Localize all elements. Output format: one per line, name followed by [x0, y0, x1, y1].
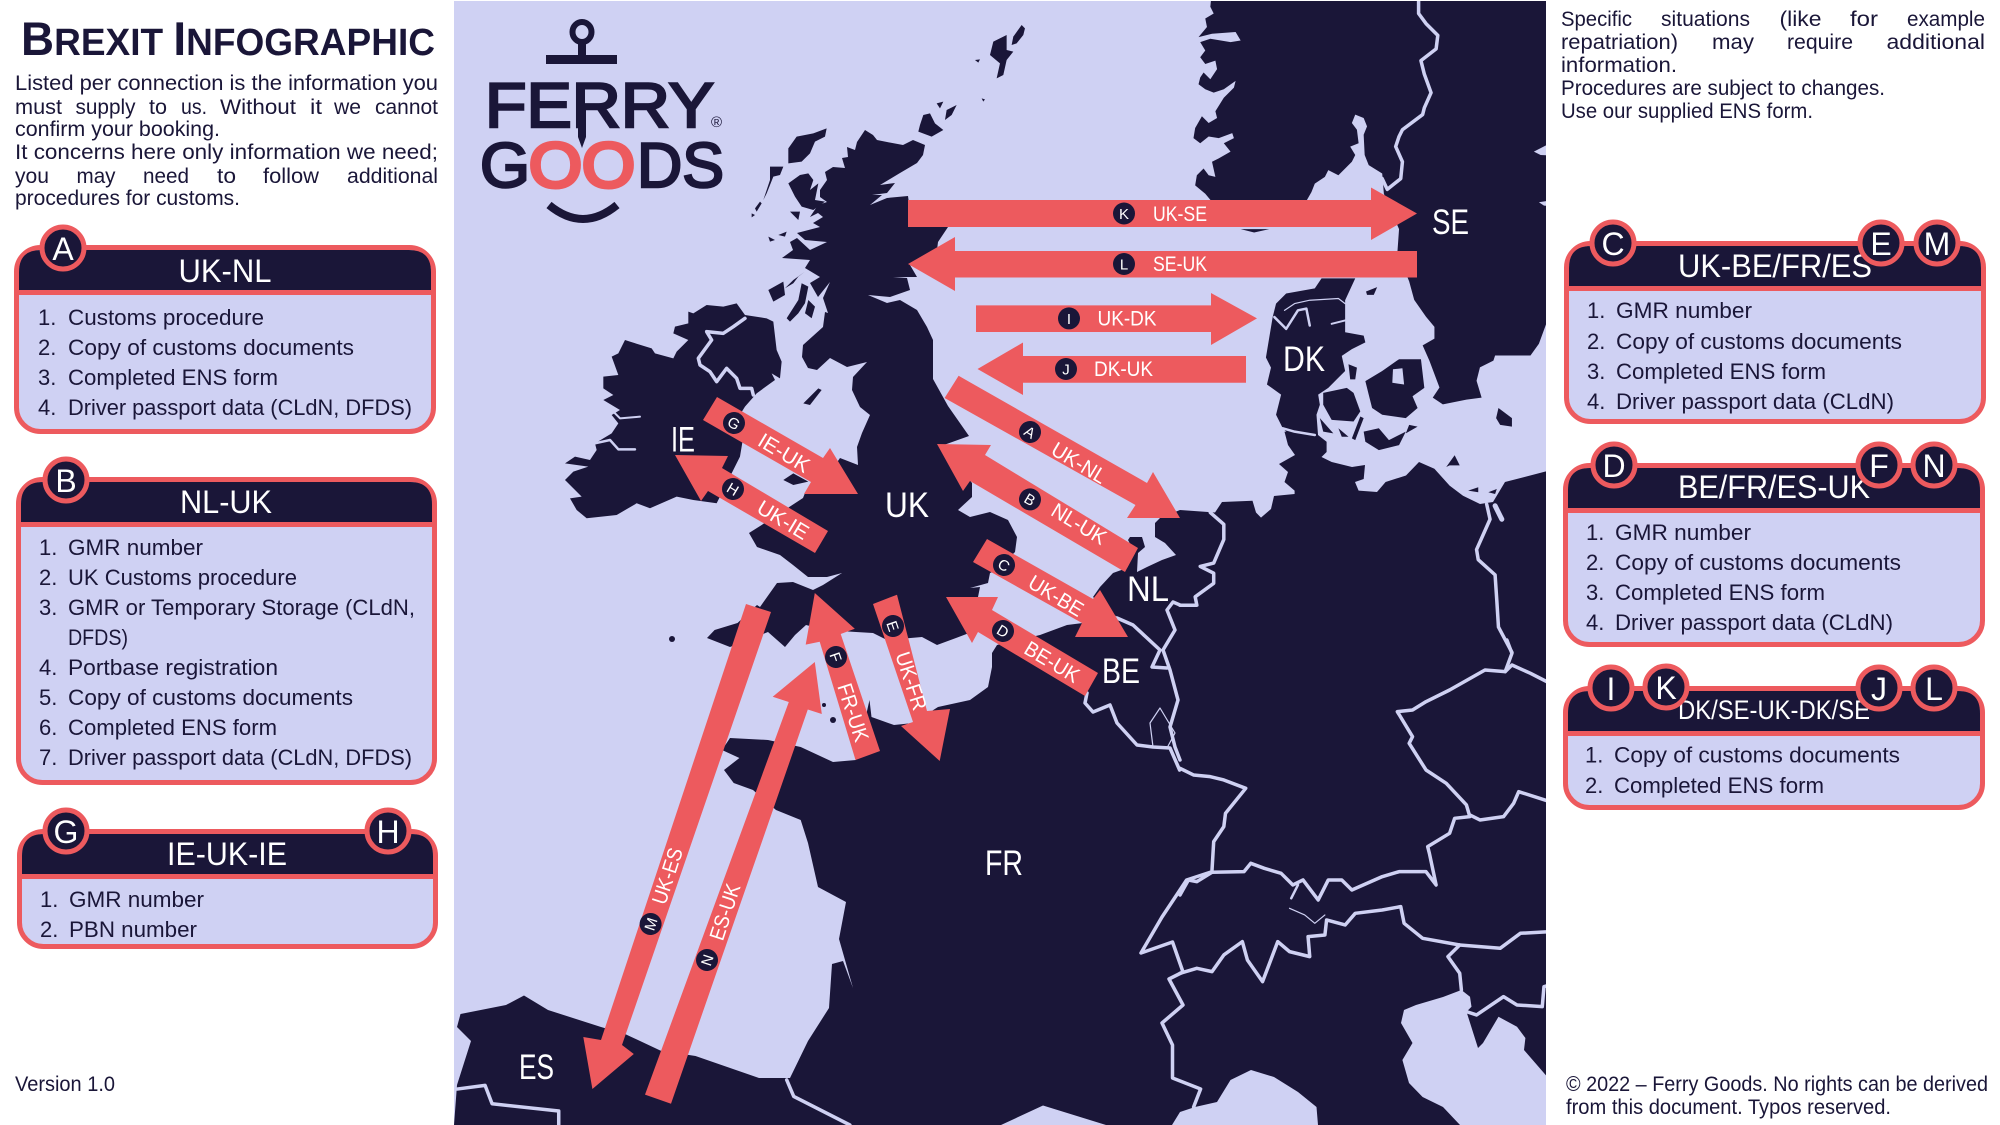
version note: Version 1.0 — [15, 1073, 115, 1096]
intro text: we — [333, 96, 361, 119]
list: 1. — [1587, 298, 1605, 323]
list: 5. — [39, 685, 57, 710]
intro text: to — [149, 96, 167, 119]
notes text: Use our supplied ENS form. — [1561, 100, 1813, 123]
route label N: N — [698, 953, 718, 968]
copyright note: from this document. Typos reserved. — [1566, 1096, 1891, 1119]
badge J — [1858, 667, 1900, 709]
badge N: N — [1922, 448, 1946, 484]
notes text: Procedures are subject to changes. — [1561, 77, 1885, 100]
badge F — [1858, 444, 1900, 486]
badge G — [45, 810, 87, 852]
list: Completed ENS form — [1614, 773, 1824, 798]
list: 7. — [39, 745, 57, 770]
badge E: E — [1870, 226, 1892, 262]
intro text: follow — [263, 165, 320, 188]
logo letters DS: DS — [637, 131, 724, 201]
arrow: UK-IE — [675, 455, 828, 553]
notes text: Specific — [1561, 8, 1632, 31]
route text BE-UK: BE-UK — [1020, 637, 1083, 688]
route label A — [1015, 417, 1045, 447]
notes text: require — [1787, 31, 1853, 54]
route text DK-UK: DK-UK — [1094, 358, 1153, 381]
list: Completed ENS form — [1615, 580, 1825, 605]
route text UK-DK: UK-DK — [1098, 308, 1156, 330]
list: 1. — [1586, 520, 1604, 545]
heading: DK/SE-UK-DK/SE — [1678, 695, 1870, 725]
land: Ireland — [565, 303, 782, 518]
list: Driver passport data (CLdN) — [1615, 610, 1893, 635]
badge D — [1593, 444, 1635, 486]
panel: DK/SE-UK-DK/SE — [1565, 666, 1983, 808]
list: GMR number — [69, 887, 204, 912]
panel: BE/FR/ES-UK — [1565, 444, 1983, 644]
badge A: A — [52, 231, 74, 267]
arrow: BE-UK — [946, 597, 1098, 696]
route text UK-IE: UK-IE — [753, 496, 813, 545]
title: BREXIT INFOGRAPHIC — [21, 12, 435, 65]
arrow: SE-UK — [908, 237, 1417, 291]
country label BE: BE — [1102, 652, 1140, 691]
arrow: UK-NL — [945, 376, 1180, 518]
list — [1585, 742, 1900, 798]
country label ES: ES — [519, 1048, 554, 1087]
arrow: NL-UK — [937, 444, 1138, 572]
list: Driver passport data (CLdN) — [1616, 389, 1894, 414]
intro text: need — [143, 165, 189, 188]
arrow: UK-FR — [873, 595, 950, 761]
country label UK: UK — [885, 486, 929, 525]
arrow: DK-UK — [978, 342, 1246, 395]
list: 4. — [1586, 610, 1604, 635]
route label F: F — [826, 650, 845, 664]
route label D: D — [993, 622, 1012, 642]
list: Copy of customs documents — [1614, 742, 1900, 768]
country label NL: NL — [1127, 570, 1169, 609]
route label J: J — [1062, 362, 1070, 378]
arrow: UK-ES — [583, 604, 771, 1089]
list: 4. — [1587, 389, 1605, 414]
route label B: B — [1021, 490, 1038, 510]
notes text: example — [1907, 8, 1985, 31]
land: Great Britain — [707, 130, 1017, 647]
panel: NL-UK — [18, 459, 435, 782]
badge L: L — [1925, 671, 1943, 707]
list: GMR number — [1615, 520, 1751, 545]
route label L — [1113, 253, 1135, 275]
intro text: confirm your booking. — [15, 118, 220, 141]
badge A — [42, 227, 84, 269]
list: 6. — [39, 715, 57, 740]
route label H — [718, 474, 748, 504]
panel: UK-BE/FR/ES — [1566, 222, 1984, 422]
list: Copy of customs documents — [68, 685, 353, 710]
notes text: information. — [1561, 54, 1677, 77]
notes text: repatriation) — [1561, 31, 1678, 54]
list: Completed ENS form — [68, 365, 278, 390]
list: Completed ENS form — [68, 715, 277, 740]
route label C: C — [994, 556, 1013, 576]
route label C — [989, 550, 1019, 580]
list: 1. — [38, 305, 56, 330]
land: Scandinavia — [1193, 0, 1557, 404]
list: 2. — [40, 917, 58, 942]
route label I: I — [1067, 311, 1071, 328]
badge B: B — [55, 463, 77, 499]
route text FR-UK: FR-UK — [832, 681, 873, 745]
icon: anchor — [546, 22, 617, 148]
copyright note — [1566, 1073, 1988, 1119]
arrow: IE-UK — [703, 397, 858, 494]
badge I — [1590, 667, 1632, 709]
notes text: for — [1850, 8, 1878, 31]
badge K — [1645, 666, 1687, 708]
route label M — [637, 910, 664, 938]
route text UK-SE: UK-SE — [1153, 203, 1207, 226]
list: 1. — [40, 887, 58, 912]
route label L: L — [1120, 256, 1128, 274]
route text ES-UK: ES-UK — [706, 881, 745, 943]
list: 2. — [1587, 329, 1605, 354]
route text UK-FR: UK-FR — [890, 649, 931, 713]
badge B — [45, 459, 87, 501]
notes text — [1561, 8, 1985, 123]
intro text: it — [310, 96, 322, 119]
list: PBN number — [69, 917, 197, 942]
badge E — [1860, 222, 1902, 264]
list: 3. — [38, 365, 56, 390]
land: Denmark — [1266, 278, 1512, 494]
heading: NL-UK — [180, 484, 272, 520]
heading: UK-NL — [178, 253, 272, 289]
route label D — [988, 616, 1018, 646]
intro text: may — [76, 165, 116, 188]
land: Scottish islands — [752, 25, 1025, 322]
badge F: F — [1869, 448, 1889, 484]
route label M: M — [642, 916, 662, 933]
route label H: H — [723, 480, 742, 500]
list: Customs procedure — [68, 305, 264, 330]
route text UK-NL: UK-NL — [1047, 438, 1110, 489]
badge H — [367, 810, 409, 852]
logo word FERRY: FERRY — [485, 71, 714, 141]
country label SE: SE — [1432, 203, 1469, 242]
list: 3. — [39, 595, 57, 620]
route label F — [822, 643, 850, 671]
intro text: you — [15, 165, 49, 188]
arrow: UK-BE — [973, 539, 1128, 637]
list — [38, 305, 412, 420]
logo smile — [549, 205, 617, 219]
list: 2. — [1586, 550, 1604, 575]
notes text: additional — [1886, 31, 1985, 54]
route label E — [879, 612, 907, 640]
list: Portbase registration — [68, 655, 278, 680]
badge I: I — [1607, 671, 1615, 707]
route label N — [693, 946, 721, 974]
list: 2. — [1585, 773, 1603, 798]
route text NL-UK: NL-UK — [1047, 499, 1110, 550]
map of north-west Europe — [454, 0, 1557, 1125]
list: Copy of customs documents — [1616, 329, 1902, 354]
route label A: A — [1021, 423, 1038, 443]
heading: BE/FR/ES-UK — [1678, 469, 1870, 505]
route label I — [1058, 307, 1080, 329]
intro text: procedures for customs. — [15, 187, 240, 210]
logo letters OO: OO — [529, 131, 635, 201]
badge K: K — [1655, 670, 1677, 706]
route text SE-UK: SE-UK — [1153, 253, 1207, 276]
list: GMR number — [68, 535, 203, 560]
route label G — [719, 408, 749, 438]
list: 3. — [1587, 359, 1605, 384]
country label IE: IE — [671, 421, 695, 460]
list: UK Customs procedure — [68, 565, 297, 590]
list: 1. — [1585, 742, 1603, 768]
heading: UK-BE/FR/ES — [1678, 248, 1872, 284]
intro text: us. — [181, 96, 207, 119]
route label J — [1055, 358, 1077, 380]
badge G: G — [54, 814, 78, 850]
list: Copy of customs documents — [68, 335, 354, 360]
list: GMR or Temporary Storage (CLdN, — [68, 595, 415, 620]
copyright note: © 2022 – Ferry Goods. No rights can be derived — [1566, 1073, 1988, 1096]
list: 2. — [39, 565, 57, 590]
panel: UK-NL — [16, 227, 434, 432]
intro text — [15, 72, 438, 210]
badge L — [1913, 667, 1955, 709]
arrow: UK-DK — [976, 293, 1257, 345]
intro text: Listed per connection is the information you — [15, 72, 438, 95]
badge C: C — [1601, 226, 1625, 262]
list — [1586, 520, 1901, 635]
land: mainland Europe — [454, 432, 1550, 1125]
list: Driver passport data (CLdN, DFDS) — [68, 745, 412, 770]
list: GMR number — [1616, 298, 1752, 323]
list — [40, 887, 204, 942]
route label K — [1113, 202, 1135, 224]
notes text: situations — [1661, 8, 1750, 31]
intro text: to — [217, 165, 236, 188]
country label FR: FR — [985, 844, 1023, 883]
list: 3. — [1586, 580, 1604, 605]
badge J: J — [1871, 671, 1887, 707]
list: 4. — [38, 395, 56, 420]
intro text: cannot — [375, 96, 438, 119]
land: small islands — [669, 388, 836, 723]
list: 1. — [39, 535, 57, 560]
registered mark: ® — [711, 114, 722, 131]
list: Completed ENS form — [1616, 359, 1826, 384]
list: DFDS) — [68, 625, 128, 650]
list: Copy of customs documents — [1615, 550, 1901, 575]
logo: Ferry Goods — [480, 22, 724, 219]
list: 4. — [39, 655, 57, 680]
route label K: K — [1119, 206, 1129, 223]
badge D: D — [1602, 448, 1626, 484]
notes text: (like — [1780, 8, 1822, 31]
badge N — [1913, 444, 1955, 486]
intro text: Without — [220, 96, 296, 119]
notes text: may — [1712, 31, 1755, 54]
panel: IE-UK-IE — [19, 810, 436, 946]
badge M: M — [1924, 226, 1950, 262]
arrow: UK-SE — [908, 188, 1417, 240]
list: 2. — [38, 335, 56, 360]
intro text: must — [15, 96, 62, 119]
list — [1587, 298, 1902, 414]
country label DK: DK — [1283, 340, 1325, 379]
intro text: supply — [76, 96, 136, 119]
intro text: additional — [347, 165, 438, 188]
route label B — [1015, 484, 1045, 514]
arrow: ES-UK — [645, 662, 822, 1104]
list — [39, 535, 415, 770]
route label E: E — [882, 619, 902, 634]
route text IE-UK: IE-UK — [754, 429, 814, 478]
country borders and inlets — [457, 0, 1550, 1125]
route text UK-BE: UK-BE — [1024, 571, 1087, 622]
route label G: G — [724, 414, 743, 434]
Baltic inlets — [1534, 145, 1546, 206]
logo letter G: G — [480, 131, 530, 201]
arrow: FR-UK — [806, 593, 880, 760]
badge C — [1592, 222, 1634, 264]
heading: IE-UK-IE — [167, 836, 287, 872]
route text UK-ES: UK-ES — [648, 845, 688, 907]
list: Driver passport data (CLdN, DFDS) — [68, 395, 412, 420]
badge H: H — [376, 814, 400, 850]
badge M — [1916, 222, 1958, 264]
intro text: It concerns here only information we need; — [15, 141, 438, 164]
